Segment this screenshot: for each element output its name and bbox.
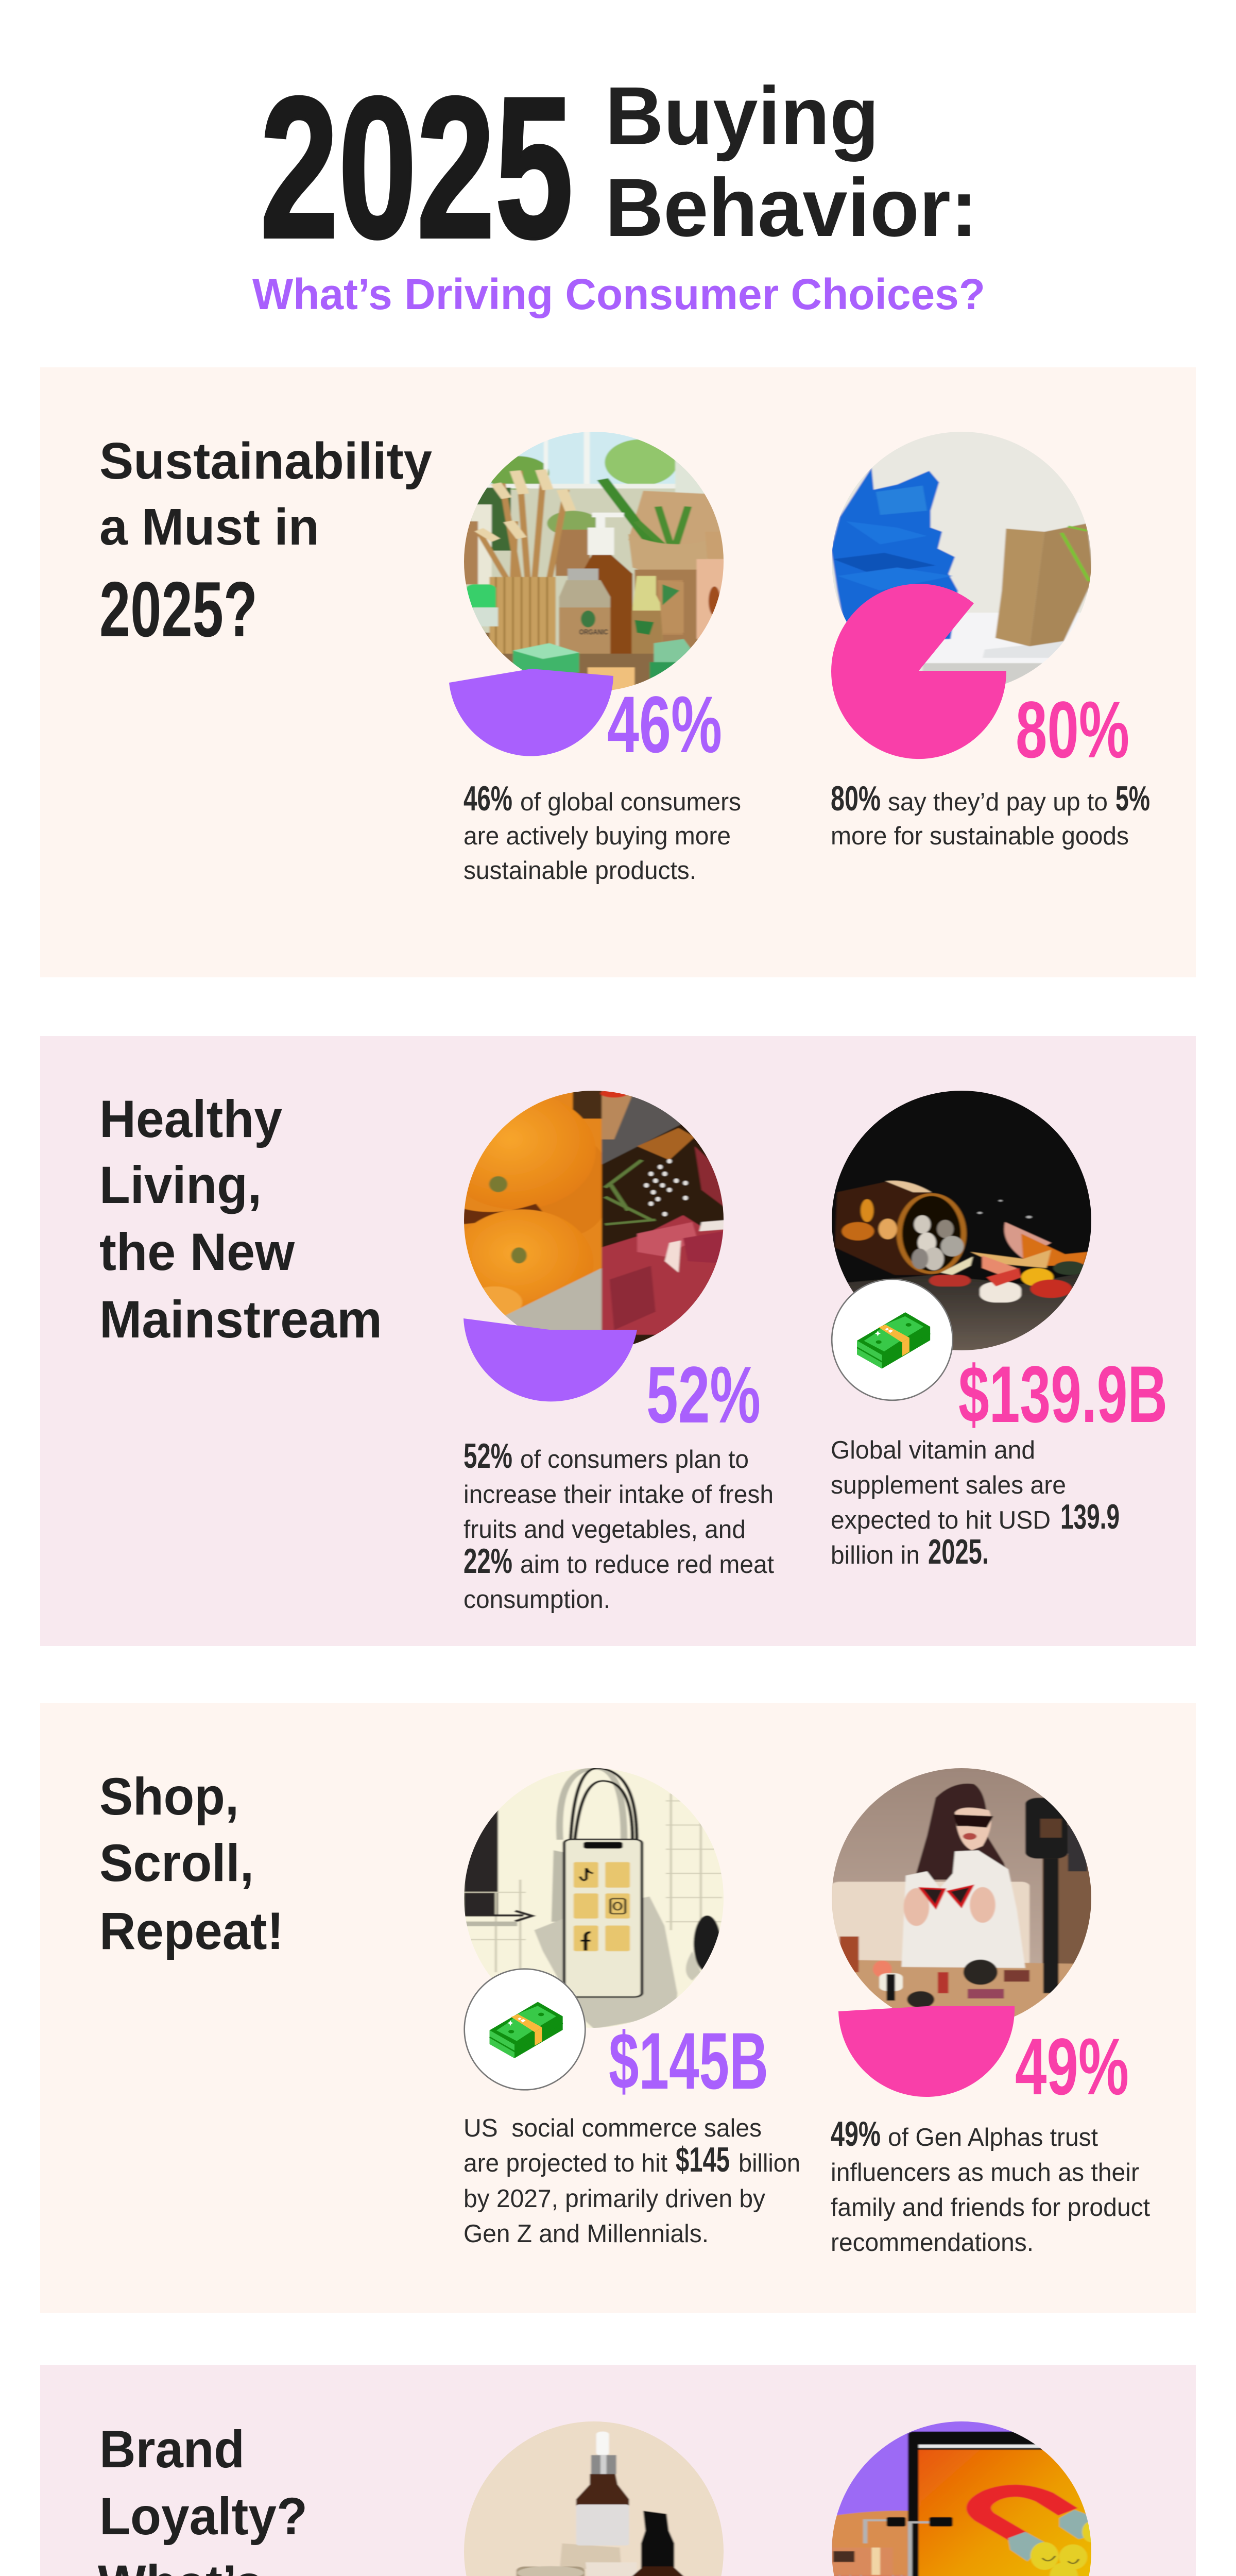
heading: healthy living	[99, 1090, 382, 1349]
heading: healthy living: Living,	[99, 1156, 262, 1214]
text: 49% of Gen Alphas: influencers as much as their	[831, 2159, 1139, 2187]
text: global vitamin sales: billion in	[831, 1541, 920, 1569]
text: 49% of Gen Alphas	[831, 2114, 1150, 2257]
stat: $145B: $145B	[609, 2016, 768, 2106]
text: 46% of global consumers: of global consumers	[520, 788, 741, 816]
text: 52% of consumers: 52%	[464, 1436, 512, 1476]
heading: brand loyalty: Brand	[99, 2420, 245, 2479]
text: 46% of global consumers: are actively buying more	[464, 822, 731, 850]
text: 80% would pay more	[831, 779, 1150, 850]
text: 52% of consumers: of consumers plan to	[520, 1446, 749, 1473]
title: Buying	[605, 70, 879, 162]
text: 80% would pay more: 5%	[1115, 779, 1150, 818]
text: 49% of Gen Alphas: family and friends for product	[831, 2194, 1150, 2222]
heading: sustainability: 2025?	[99, 566, 258, 653]
text: 49% of Gen Alphas: 49%	[831, 2114, 881, 2154]
text: 49% of Gen Alphas: recommendations.	[831, 2229, 1034, 2257]
text: 80% would pay more: 80%	[831, 779, 881, 818]
text: 52% of consumers: consumption.	[464, 1586, 610, 1614]
heading: shop scroll repeat: Shop,	[99, 1767, 239, 1826]
photo: plastic and paper bags	[832, 432, 1091, 684]
photo: phone with shopping handles	[464, 1768, 724, 2028]
title	[260, 55, 977, 280]
text: 49% of Gen Alphas: of Gen Alphas trust	[888, 2124, 1098, 2151]
text: global vitamin sales: Global vitamin and	[831, 1436, 1035, 1464]
stat: 49% gen alpha: 49%	[1015, 2022, 1129, 2112]
text: US social commerce: by 2027, primarily driven by	[464, 2185, 765, 2213]
photo: private label bottles	[464, 2421, 724, 2576]
text: 46% of global consumers	[464, 779, 741, 885]
panel: healthy living	[40, 1036, 1196, 1646]
stat: 80%: 80%	[1016, 685, 1129, 775]
panel: brand loyalty	[40, 2365, 1196, 2576]
heading: sustainability: Sustainability	[99, 432, 432, 490]
icon: money circle	[832, 1279, 953, 1400]
heading: shop scroll repeat: Scroll,	[99, 1834, 254, 1892]
title: Behavior:	[605, 161, 977, 253]
heading: shop scroll repeat	[99, 1767, 284, 1960]
text: global vitamin sales	[831, 1436, 1120, 1571]
heading: healthy living: Mainstream	[99, 1290, 382, 1349]
text: 52% of consumers: aim to reduce red meat	[520, 1551, 774, 1579]
panel: shop scroll repeat	[40, 1703, 1196, 2313]
heading: shop scroll repeat: Repeat!	[99, 1902, 284, 1960]
text: 52% of consumers: 22%	[464, 1541, 512, 1581]
pie: 46%	[449, 669, 613, 756]
heading: sustainability	[99, 432, 432, 653]
text: US social commerce: $145	[676, 2140, 730, 2179]
text: global vitamin sales: expected to hit USD	[831, 1506, 1051, 1534]
photo: influencer woman	[832, 1768, 1091, 2016]
text: 80% would pay more: say they’d pay up to	[888, 788, 1108, 816]
heading: sustainability: a Must in	[99, 498, 319, 556]
text: global vitamin sales: supplement sales are	[831, 1471, 1066, 1499]
pie: 80%	[831, 584, 1006, 759]
text: 52% of consumers: increase their intake of fresh	[464, 1481, 774, 1509]
photo: oranges and meat	[464, 1091, 724, 1345]
subtitle: What’s Driving Consumer Choices?	[252, 270, 985, 318]
photo: eco products: ORGANIC	[579, 628, 608, 636]
stat: 46%: 46%	[607, 680, 722, 770]
text: US social commerce: billion	[739, 2149, 800, 2177]
stat: 52%: 52%	[646, 1350, 761, 1440]
text: 46% of global consumers: 46%	[464, 779, 512, 818]
text: 46% of global consumers: sustainable products.	[464, 857, 696, 885]
heading: brand loyalty	[98, 2420, 307, 2576]
heading: healthy living: the New	[99, 1223, 295, 1281]
text: 52% of consumers: fruits and vegetables, and	[464, 1516, 746, 1544]
text: US social commerce: US social commerce sales	[464, 2114, 762, 2142]
photo: eco products	[464, 432, 724, 690]
pie: 52%	[464, 1318, 637, 1401]
heading: healthy living: Healthy	[99, 1090, 282, 1148]
photo: loyalty magnet laptop	[832, 2421, 1091, 2576]
text: 52% of consumers	[464, 1436, 774, 1614]
icon: money circle	[465, 1969, 585, 2090]
heading: brand loyalty: Loyalty?	[99, 2487, 307, 2546]
text: 80% would pay more: more for sustainable goods	[831, 822, 1129, 850]
pie: 49% gen alpha	[838, 2006, 1015, 2097]
title: 2025	[260, 55, 573, 280]
text: global vitamin sales: 139.9	[1060, 1497, 1120, 1536]
text: US social commerce: Gen Z and Millennials.	[464, 2220, 709, 2248]
text: US social commerce: are projected to hit	[464, 2149, 667, 2177]
text: global vitamin sales: 2025.	[928, 1532, 989, 1571]
panel: sustainability	[40, 367, 1196, 977]
photo: spilled vitamin pills	[832, 1091, 1091, 1350]
text: US social commerce	[464, 2114, 800, 2248]
